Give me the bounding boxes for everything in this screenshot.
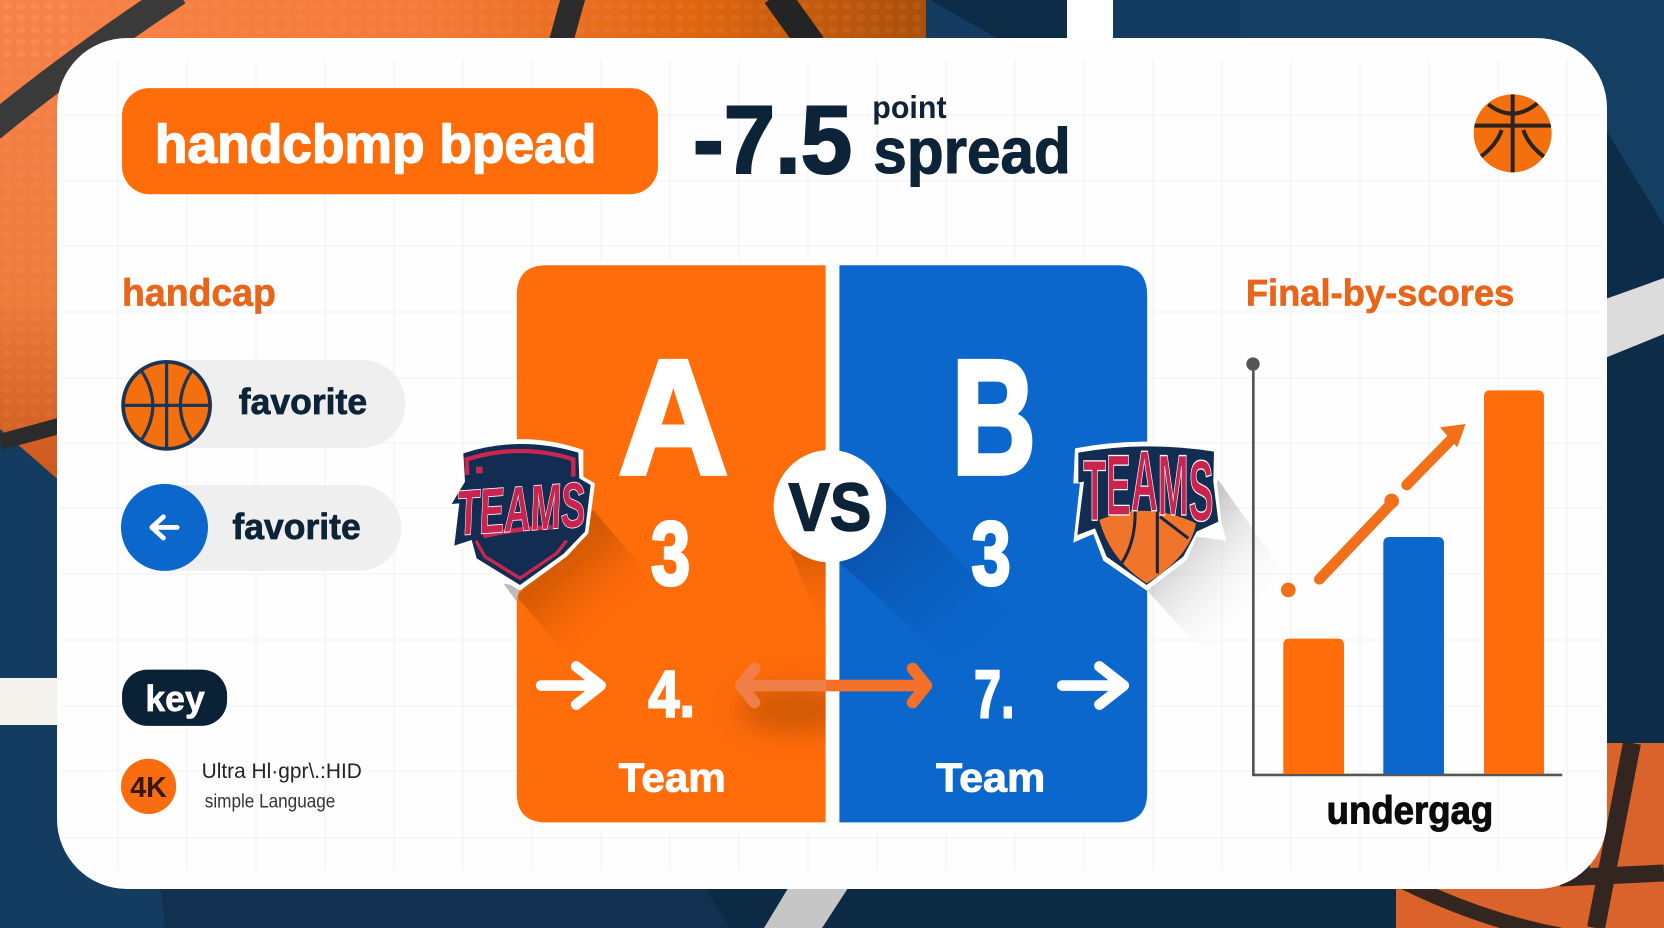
heading: final by scores: Final-by-scores xyxy=(1246,272,1514,314)
header pill: handicap spread xyxy=(122,88,658,194)
panel: team A orange xyxy=(517,265,826,822)
shadow: shield A xyxy=(503,510,720,670)
headline: -7.5 point spread xyxy=(693,87,1071,194)
headline: -7.5 point spread: spread xyxy=(873,116,1071,187)
chart: bar chart final scores xyxy=(1246,357,1562,832)
key text xyxy=(202,760,362,813)
key badge: key xyxy=(145,678,205,719)
number 3: 3 xyxy=(972,504,1011,605)
icon: 4K badge: 4K xyxy=(130,772,167,804)
letter B: B xyxy=(952,327,1036,508)
label: underdog: undergag xyxy=(1327,788,1493,832)
bar: high orange xyxy=(1484,390,1544,774)
badge: VS: VS xyxy=(788,471,871,546)
icon: basketball xyxy=(123,362,210,449)
number 3: 3 xyxy=(651,504,690,605)
key text: Ultra Hl·gpr\.:HID xyxy=(202,760,362,783)
shadow: shield B xyxy=(1147,480,1293,663)
logo: team B shield: TEAMS xyxy=(1083,434,1213,540)
heading: handicap: handcap xyxy=(122,272,276,315)
legend item: favorite basketball xyxy=(122,360,405,449)
label: Team: Team xyxy=(936,755,1045,801)
arrow: right white xyxy=(541,666,601,705)
legend item: favorite basketball: favorite xyxy=(239,381,367,422)
bar: mid blue xyxy=(1383,537,1444,774)
shadow: vs circle on blue xyxy=(839,478,1051,658)
logo: team A shield xyxy=(447,439,720,670)
ball in shield xyxy=(1099,510,1196,584)
arrow: double headed spread xyxy=(739,669,926,734)
label: Team: Team xyxy=(619,755,726,801)
shadow: vs circle on orange xyxy=(791,531,826,637)
number 7: 7. xyxy=(974,657,1015,732)
arrow: rising trend xyxy=(1281,424,1466,597)
key badge xyxy=(122,670,227,726)
background: basketball bottom right xyxy=(1396,743,1664,928)
axes xyxy=(1246,357,1562,775)
legend item: favorite arrow xyxy=(121,484,401,571)
headline: -7.5 point spread: -7.5 xyxy=(693,87,852,194)
arrow: right white xyxy=(1062,666,1124,705)
header pill: handicap spread: handcbmp bpead xyxy=(155,114,596,174)
logo: team B shield xyxy=(1073,442,1264,628)
icon: 4K badge xyxy=(121,759,176,814)
icon: basketball top right xyxy=(1473,93,1552,173)
number 4: 4. xyxy=(648,656,695,730)
legend item: favorite arrow: favorite xyxy=(232,506,361,547)
badge: VS xyxy=(774,450,886,562)
panel: team B blue xyxy=(839,265,1147,822)
background: large basketball top left xyxy=(0,0,926,928)
letter A: A xyxy=(619,327,728,508)
headline: -7.5 point spread: point xyxy=(872,89,947,125)
logo: team A shield: TEAMS xyxy=(455,470,587,549)
icon: blue arrow button xyxy=(121,484,208,571)
key text: simple Language xyxy=(205,792,335,813)
bar: low orange xyxy=(1283,639,1344,774)
